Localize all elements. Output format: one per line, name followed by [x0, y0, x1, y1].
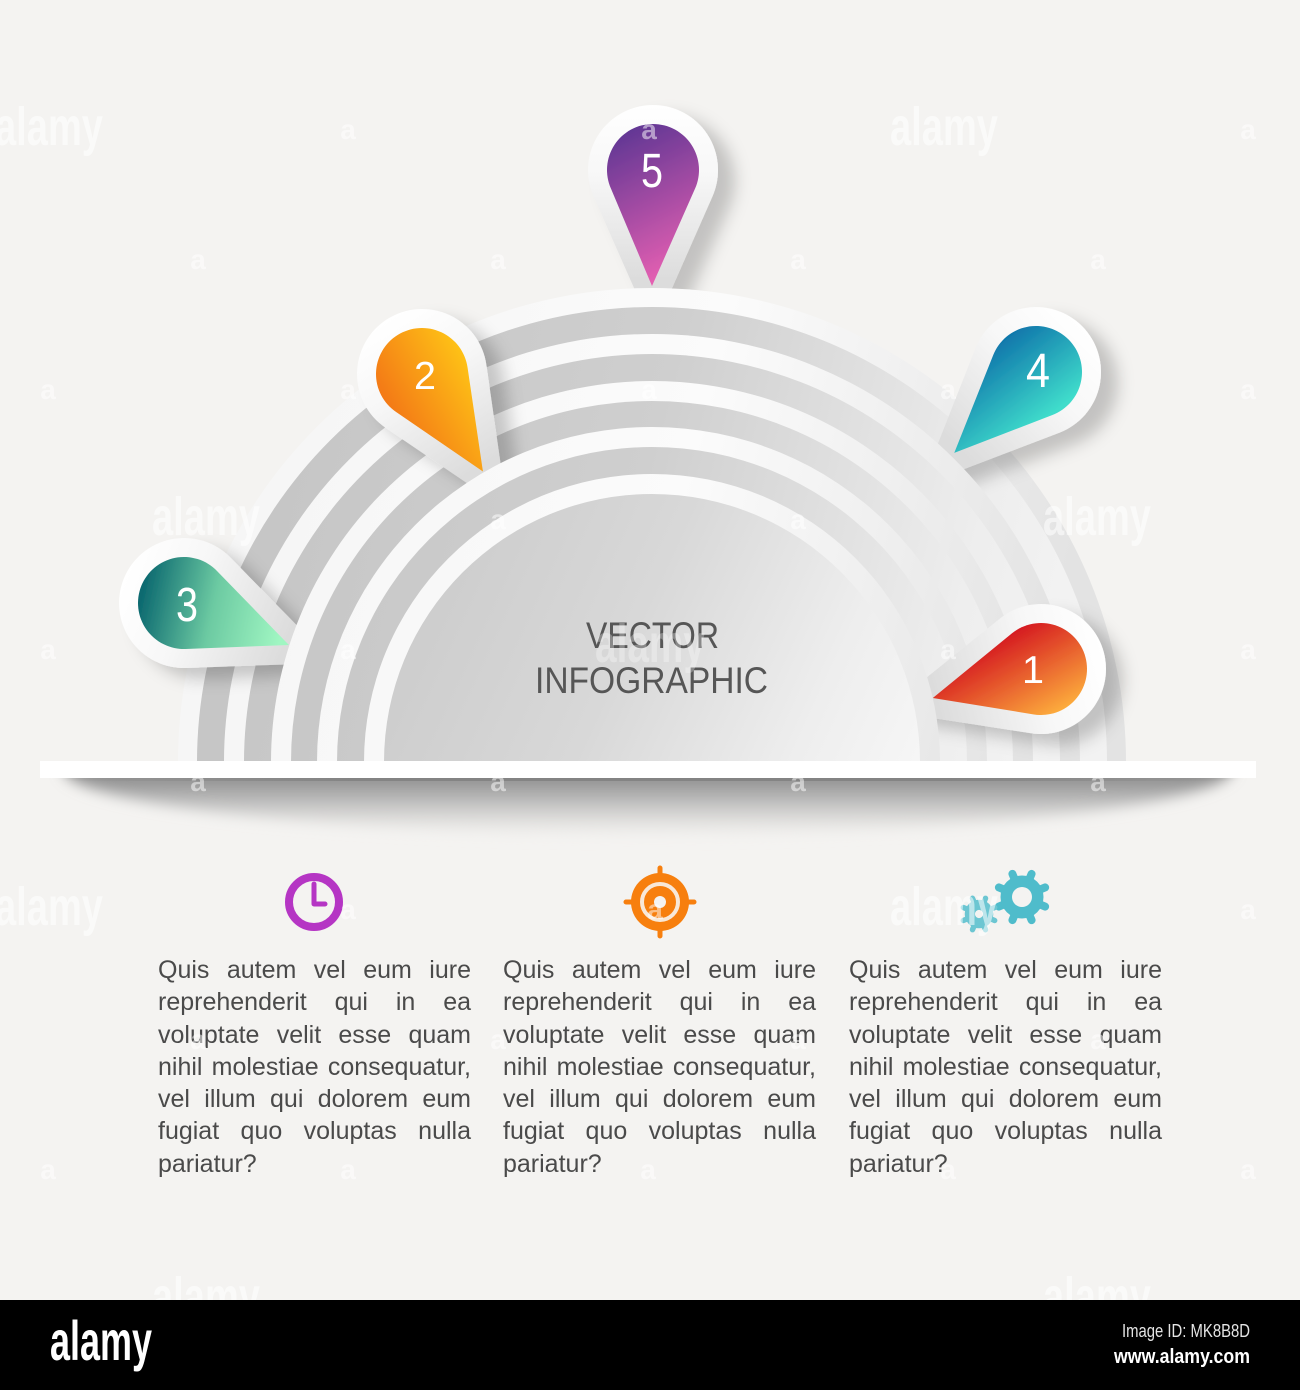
text column 1	[158, 956, 472, 1178]
small gear	[957, 892, 1001, 936]
text column 3	[849, 956, 1162, 1178]
text column 1: voluptate velit esse quam	[158, 1021, 471, 1049]
text column 2: Quis autem vel eum iure	[503, 956, 816, 984]
text: a	[1090, 244, 1106, 275]
text: a	[490, 766, 506, 797]
pin numbers: 5	[641, 145, 663, 198]
text: a	[490, 504, 506, 535]
footer bar	[0, 1300, 1300, 1390]
shelf shadow	[58, 778, 1238, 830]
text column 3: pariatur?	[849, 1150, 948, 1178]
pin numbers: 4	[1026, 345, 1050, 398]
text column 1: Quis autem vel eum iure	[158, 956, 471, 984]
text: a	[490, 244, 506, 275]
central disc	[364, 474, 938, 761]
text: a	[340, 374, 356, 405]
text column 2: nihil molestiae consequatur,	[503, 1053, 816, 1081]
outer arc band	[197, 288, 1126, 761]
pin 1 marker	[928, 604, 1130, 752]
text column 1: vel illum qui dolorem eum	[158, 1085, 471, 1113]
text column 2: pariatur?	[503, 1150, 602, 1178]
pin 3 marker	[119, 538, 300, 686]
text column 1: nihil molestiae consequatur,	[158, 1053, 471, 1081]
text column 3: reprehenderit qui in ea	[849, 988, 1162, 1016]
text: a	[190, 244, 206, 275]
text: a	[790, 504, 806, 535]
text: a	[1240, 1154, 1256, 1185]
text: a	[641, 114, 657, 145]
center title	[535, 615, 768, 701]
icon: clock	[289, 877, 339, 927]
text: a	[1240, 374, 1256, 405]
text column 2: voluptate velit esse quam	[503, 1021, 816, 1049]
text: a	[790, 766, 806, 797]
text column 1: reprehenderit qui in ea	[158, 988, 471, 1016]
footer image id: Image ID: MK8B8D	[1122, 1321, 1250, 1341]
semicircle layered diagram	[119, 105, 1130, 761]
pin numbers: 3	[176, 579, 198, 632]
text: a	[640, 1154, 656, 1185]
text column 2: fugiat quo voluptas nulla	[503, 1117, 816, 1145]
icon: target	[626, 868, 694, 936]
text: a	[1240, 634, 1256, 665]
fourth arc band	[317, 427, 987, 761]
text: a	[1240, 894, 1256, 925]
text: a	[340, 634, 356, 665]
text: a	[1090, 766, 1106, 797]
text column 2: vel illum qui dolorem eum	[503, 1085, 816, 1113]
text: a	[40, 634, 56, 665]
text column 1: pariatur?	[158, 1150, 257, 1178]
text column 3: fugiat quo voluptas nulla	[849, 1117, 1162, 1145]
icon: gears	[957, 864, 1055, 936]
text column 3: nihil molestiae consequatur,	[849, 1053, 1162, 1081]
text: a	[1090, 1024, 1106, 1055]
text: a	[190, 1024, 206, 1055]
second arc band	[224, 334, 1080, 761]
shelf	[40, 761, 1256, 778]
text: a	[340, 114, 356, 145]
text: a	[647, 894, 663, 925]
text: a	[940, 374, 956, 405]
pin 2 marker	[357, 309, 521, 486]
text: a	[641, 374, 657, 405]
text: alamy	[890, 877, 998, 937]
pin 4 marker	[938, 307, 1125, 488]
text: a	[1240, 114, 1256, 145]
text: alamy	[1043, 487, 1151, 547]
third arc band	[271, 381, 1033, 761]
center title: INFOGRAPHIC	[535, 660, 768, 701]
text: a	[490, 1024, 506, 1055]
pin numbers: 2	[414, 355, 436, 398]
text column 2: reprehenderit qui in ea	[503, 988, 816, 1016]
text: a	[340, 894, 356, 925]
text: a	[940, 1154, 956, 1185]
text: a	[190, 766, 206, 797]
text column 1: fugiat quo voluptas nulla	[158, 1117, 471, 1145]
text: alamy	[890, 97, 998, 157]
text column 2	[503, 956, 816, 1178]
text column 3: voluptate velit esse quam	[849, 1021, 1162, 1049]
center title: VECTOR	[586, 615, 719, 656]
text: a	[790, 244, 806, 275]
text: alamy	[1043, 1267, 1151, 1327]
text: alamy	[595, 614, 705, 674]
large gear	[989, 864, 1055, 930]
footer logo: alamy	[50, 1309, 152, 1372]
pin numbers: 1	[1022, 649, 1044, 692]
pin 5 marker	[588, 105, 718, 331]
text: a	[340, 1154, 356, 1185]
text column 3: vel illum qui dolorem eum	[849, 1085, 1162, 1113]
text: alamy	[152, 487, 260, 547]
text: a	[40, 1154, 56, 1185]
footer url: www.alamy.com	[1113, 1346, 1250, 1368]
text: a	[790, 1024, 806, 1055]
text: a	[40, 374, 56, 405]
text column 3: Quis autem vel eum iure	[849, 956, 1162, 984]
text: a	[940, 634, 956, 665]
pin numbers	[176, 145, 1050, 692]
text: alamy	[152, 1267, 260, 1327]
